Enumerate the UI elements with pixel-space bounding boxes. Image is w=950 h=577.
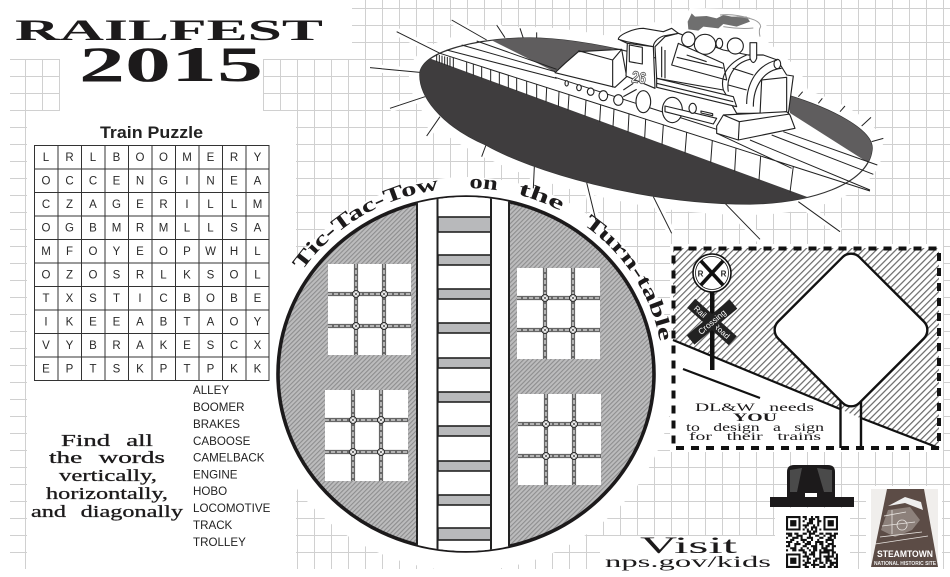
word search grid: I: [185, 199, 189, 211]
puzzle instructions: horizontally,: [46, 484, 168, 503]
word search grid: W: [205, 246, 216, 258]
word search grid: I: [185, 176, 189, 188]
word search grid: O: [42, 270, 51, 282]
word search grid: S: [207, 270, 215, 282]
word search grid: S: [207, 340, 215, 352]
word search grid: C: [65, 176, 74, 188]
puzzle instructions: Find all: [61, 431, 153, 450]
turntable circle: [278, 197, 654, 551]
turntable dark pit sections: [420, 38, 872, 204]
word search grid: K: [230, 364, 238, 376]
word search grid: A: [136, 316, 144, 328]
panel: design a sign: [673, 248, 939, 448]
word search grid: X: [66, 293, 74, 305]
puzzle instructions: vertically,: [59, 466, 157, 485]
word search grid: S: [230, 222, 238, 234]
word search grid: K: [183, 270, 191, 282]
word list: ALLEY: [193, 384, 229, 397]
word search grid: E: [207, 152, 215, 164]
word search grid: R: [112, 340, 121, 352]
puzzle instructions: the words: [49, 448, 165, 467]
sign caption: for their trains: [689, 429, 822, 443]
word search grid: O: [89, 246, 98, 258]
word search grid: O: [159, 246, 168, 258]
word search grid: T: [113, 293, 120, 305]
word search grid: L: [90, 152, 97, 164]
word search grid: L: [254, 246, 261, 258]
word list: BRAKES: [193, 418, 240, 431]
puzzle heading: Train Puzzle: [100, 124, 203, 142]
word search grid: A: [89, 199, 97, 211]
word search grid: O: [230, 316, 239, 328]
word search grid: P: [66, 364, 74, 376]
word search grid: B: [230, 293, 238, 305]
word search grid: M: [182, 152, 192, 164]
word search grid: C: [230, 340, 238, 352]
word search grid: L: [254, 270, 261, 282]
word search grid: M: [159, 222, 168, 234]
word list: TROLLEY: [193, 536, 246, 549]
word search grid: M: [112, 222, 121, 234]
word list: LOCOMOTIVE: [193, 502, 271, 515]
word search grid: K: [160, 340, 168, 352]
word search grid: T: [89, 364, 97, 376]
railroad crossing sign: R: [698, 270, 704, 278]
word search grid: E: [136, 199, 144, 211]
word search grid: E: [183, 340, 191, 352]
word search grid: P: [207, 364, 215, 376]
sign caption: to design a sign: [686, 420, 824, 434]
curved heading: [292, 178, 670, 340]
word search grid: B: [89, 222, 97, 234]
logo: Steamtown National Historic Site: STEAMTOWN: [877, 549, 933, 559]
word list: ENGINE: [193, 468, 238, 482]
railroad crossing sign: Rail Road: [692, 304, 731, 341]
word search grid: E: [254, 293, 262, 305]
track and ties: [437, 41, 877, 192]
word search grid: M: [41, 246, 51, 258]
railroad crossing sign: [687, 254, 737, 370]
word search grid: Z: [66, 270, 73, 282]
word search grid: S: [89, 293, 97, 305]
word search grid: X: [254, 340, 262, 352]
word search grid: P: [160, 364, 168, 376]
game board: top right: [517, 268, 600, 359]
word search grid: T: [183, 316, 191, 328]
word search grid: E: [230, 176, 238, 188]
sign caption: YOU: [733, 410, 778, 424]
tender: [555, 49, 627, 87]
illustration: locomotive on oval turntable: [370, 14, 884, 240]
word list: HOBO: [193, 485, 227, 498]
word search grid: A: [254, 222, 262, 234]
word search grid: O: [136, 152, 145, 164]
word search grid: C: [42, 199, 50, 211]
word search grid: N: [206, 176, 215, 188]
word list: CABOOSE: [193, 435, 251, 448]
word search grid: E: [113, 316, 121, 328]
word search grid: E: [89, 316, 97, 328]
word search grid: G: [65, 222, 74, 234]
word search grid: I: [138, 293, 142, 305]
word search grid: R: [159, 199, 168, 211]
word search grid: K: [254, 364, 262, 376]
word search grid: I: [44, 316, 48, 328]
word search grid: S: [113, 270, 121, 282]
hatched background: [673, 248, 939, 448]
word search grid: Y: [254, 152, 262, 164]
word search grid: L: [231, 199, 238, 211]
word search grid: A: [207, 316, 215, 328]
icon: ranger hat: [770, 465, 854, 507]
curved heading: on: [470, 178, 497, 190]
title: Railfest: RAILFEST: [15, 14, 323, 47]
word search grid: L: [207, 222, 214, 234]
blank diamond sign: [770, 249, 932, 411]
visit text: nps.gov/kids: [605, 554, 771, 571]
word search grid: C: [159, 293, 168, 305]
logo: Steamtown National Historic Site: NATIONAL HISTORIC SITE: [874, 561, 937, 567]
curved heading: the: [520, 184, 562, 210]
word list: BOOMER: [193, 401, 245, 414]
sign post: [840, 398, 861, 448]
word search grid: Y: [113, 246, 121, 258]
panel: train puzzle: [31, 124, 271, 549]
word search grid: P: [183, 246, 191, 258]
word search grid: L: [207, 199, 214, 211]
word search grid: M: [253, 199, 262, 211]
word search grid: A: [254, 176, 262, 188]
smoke: [688, 13, 761, 37]
word search grid: G: [159, 176, 168, 188]
railroad crossing sign: Crossing: [696, 307, 728, 337]
word search grid: R: [136, 270, 144, 282]
panel: tic-tac-toe on the turntable: [276, 178, 670, 553]
visit text: [605, 533, 771, 571]
word search grid: R: [230, 152, 238, 164]
word search grid: V: [42, 340, 50, 352]
word search grid: B: [113, 152, 121, 164]
word search grid: [34, 145, 269, 381]
word search grid: L: [160, 270, 167, 282]
word search grid: Y: [66, 340, 74, 352]
game board: bottom left: [325, 390, 408, 481]
word search grid: Y: [254, 316, 262, 328]
word search grid: O: [42, 176, 51, 188]
icon: QR code: [786, 516, 838, 568]
logo: Steamtown National Historic Site: [871, 489, 938, 567]
radial lines around turntable: [370, 20, 883, 239]
word search grid: L: [184, 222, 191, 234]
sign caption: [686, 400, 824, 443]
word search grid: O: [230, 270, 239, 282]
oval turntable: [420, 38, 872, 204]
word search grid: O: [159, 152, 168, 164]
word search grid: T: [42, 293, 50, 305]
word search grid: F: [66, 246, 73, 258]
word search grid: T: [183, 364, 191, 376]
title: 2015: 2015: [79, 36, 263, 92]
sign caption: DL&W needs: [695, 400, 815, 414]
curved heading: Turn-table: [586, 214, 670, 340]
word list: CAMELBACK: [193, 452, 265, 464]
word search grid: O: [42, 222, 51, 234]
word search grid: K: [136, 364, 144, 376]
railroad crossing sign: R: [721, 270, 727, 278]
railroad track: [417, 190, 509, 560]
word list: TRACK: [193, 519, 233, 532]
puzzle instructions: [31, 431, 184, 521]
word search grid: E: [42, 364, 50, 376]
word search grid: N: [136, 176, 144, 188]
word search grid: E: [113, 176, 121, 188]
game board: bottom right: [518, 394, 601, 485]
engine number 26: 26: [630, 69, 647, 88]
word search grid: O: [206, 293, 215, 305]
word search grid: Z: [66, 199, 73, 211]
puzzle instructions: and diagonally: [31, 502, 184, 521]
dashed border: [674, 248, 939, 448]
word search grid: B: [89, 340, 97, 352]
visit text: Visit: [640, 533, 738, 558]
word search grid: R: [136, 222, 144, 234]
word search grid: K: [66, 316, 74, 328]
word search grid: B: [183, 293, 191, 305]
word list: [193, 384, 271, 549]
curved heading: Tic-Tac-Tow: [292, 180, 438, 268]
word search grid: H: [230, 246, 238, 258]
word search grid: G: [112, 199, 121, 211]
word search grid: S: [113, 364, 121, 376]
locomotive: [565, 28, 795, 140]
word search grid: O: [89, 270, 98, 282]
word search grid: C: [89, 176, 97, 188]
road: [673, 340, 939, 448]
word search grid: B: [160, 316, 168, 328]
word search grid: E: [136, 246, 144, 258]
word search grid: L: [43, 152, 50, 164]
game board: top left: [328, 264, 411, 355]
word search grid: A: [136, 340, 144, 352]
word search grid: R: [65, 152, 74, 164]
